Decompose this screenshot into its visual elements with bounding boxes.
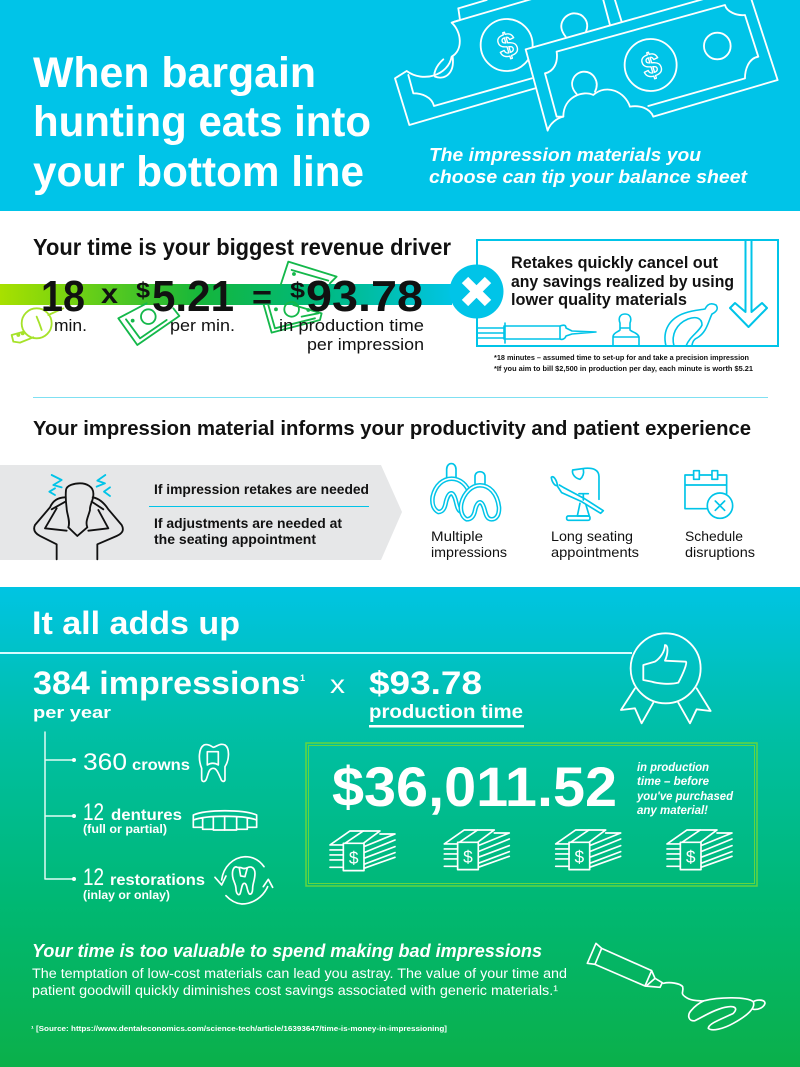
icon: x circle	[450, 264, 504, 318]
total note: time – before	[637, 776, 710, 788]
icon: dental chair	[551, 468, 603, 520]
item: restorations: 12	[83, 864, 104, 891]
icon: stressed person	[34, 475, 123, 559]
total amount: $36,011.52	[332, 755, 617, 818]
callout text	[511, 254, 734, 309]
icon: trays	[432, 464, 499, 519]
stat: production time: $93.78	[369, 665, 482, 701]
icon: syringe	[478, 323, 596, 343]
subtitle	[429, 144, 748, 187]
icon: bitten banknotes	[395, 0, 778, 131]
icon: thumbs up medal	[621, 633, 711, 723]
title: When bargain	[33, 49, 316, 97]
panel: header	[0, 0, 800, 211]
stat: impressions per year: per year	[33, 703, 111, 722]
item: restorations	[83, 864, 205, 902]
closing text: The temptation of low-cost materials can lead you astray. The value of your time and	[32, 966, 567, 981]
icon: cash stack 4	[667, 830, 732, 870]
retake conditions: the seating appointment	[154, 532, 317, 547]
icon: cash stack 1	[330, 831, 395, 871]
icon: impression tray	[665, 304, 717, 346]
total note: you've purchased	[636, 791, 734, 803]
icon: cash stack 2	[444, 830, 509, 870]
gradient bar	[0, 284, 452, 305]
title: your bottom line	[33, 148, 364, 196]
stat: production time	[369, 665, 524, 728]
equation numbers: 93.78	[306, 272, 423, 321]
item: dentures: 12	[83, 799, 104, 826]
item: crowns: 360	[83, 749, 127, 776]
total note: any material!	[637, 805, 708, 817]
closing text	[32, 966, 567, 998]
icon: dentures	[193, 811, 257, 830]
equation numbers: =	[252, 279, 272, 315]
heading: it all adds up: It all adds up	[32, 605, 240, 641]
label: schedule: Schedule	[685, 528, 743, 544]
stat: production time: production time	[369, 702, 523, 723]
retake conditions: If adjustments are needed at	[154, 516, 343, 531]
title	[33, 49, 371, 196]
footnotes	[494, 353, 753, 373]
retake conditions: If impression retakes are needed	[154, 482, 369, 497]
callout: total box	[306, 743, 757, 886]
icon: banknote small	[118, 303, 179, 345]
title: hunting eats into	[33, 98, 371, 146]
callout text: lower quality materials	[511, 291, 687, 309]
equation numbers: 5.21	[152, 272, 234, 321]
retake conditions	[149, 482, 369, 547]
label: schedule	[685, 528, 755, 560]
panel: productivity and patient experience	[0, 417, 755, 560]
icon: calendar with x	[685, 471, 733, 518]
callout text: any savings realized by using	[511, 273, 734, 291]
subtitle: The impression materials you	[429, 144, 701, 165]
equation numbers: 18	[41, 272, 85, 321]
heading: revenue driver: Your time is your biggest revenue driver	[33, 234, 451, 260]
equation numbers: $	[136, 278, 150, 303]
closing heading: Your time is too valuable to spend making bad impressions	[32, 940, 542, 961]
icon: crown tooth	[199, 744, 228, 782]
icon: bitten banknotes: $	[637, 46, 666, 87]
equation numbers: $	[290, 278, 305, 303]
icon: cash stack 1: $	[349, 848, 359, 868]
icon: down arrow	[730, 241, 767, 327]
item: crowns	[83, 749, 190, 776]
grey arrow panel	[0, 465, 402, 560]
equation labels: in production time	[279, 317, 424, 335]
closing text: patient goodwill quickly diminishes cost savings associated with generic materials.¹	[32, 983, 559, 998]
label: long seating: appointments	[551, 544, 639, 560]
total note	[636, 762, 734, 817]
item: crowns: crowns	[132, 757, 190, 774]
stat: impressions per year: 1	[300, 673, 305, 683]
icon: bottle	[613, 314, 639, 346]
subtitle: choose can tip your balance sheet	[429, 166, 748, 187]
equation numbers	[41, 272, 423, 321]
stat: impressions per year: 384 impressions	[33, 665, 300, 701]
equation labels	[54, 317, 424, 354]
item: restorations: (inlay or onlay)	[83, 890, 170, 902]
total note: in production	[637, 762, 709, 774]
icon: restoration cycle	[215, 857, 273, 904]
footnotes: *If you aim to bill $2,500 in production per day, each minute is worth $5.21	[494, 364, 753, 373]
icon: cash stack 3	[556, 830, 621, 870]
label: long seating	[551, 528, 639, 560]
tree diagram	[45, 732, 273, 904]
item: restorations: restorations	[110, 872, 205, 889]
heading: productivity: Your impression material informs your productivity and patient experience	[33, 417, 751, 440]
source footnote: ¹ [Source: https://www.dentaleconomics.com/science-tech/article/16393647/time-is-money-in-impressioning]	[31, 1026, 447, 1033]
panel: it all adds up	[0, 587, 800, 1067]
equation numbers: x	[101, 278, 118, 309]
stat: impressions per year: x	[330, 669, 345, 699]
item: long seating	[551, 468, 639, 560]
icon: cash stack 3: $	[575, 847, 585, 867]
icon: watch	[12, 305, 63, 343]
label: multiple impressions: impressions	[431, 544, 507, 560]
footnotes: *18 minutes – assumed time to set-up for and take a precision impression	[494, 353, 749, 362]
callout text: Retakes quickly cancel out	[511, 254, 718, 272]
label: multiple impressions	[431, 528, 507, 560]
stat: impressions per year	[33, 665, 345, 722]
equation labels: per min.	[170, 317, 235, 335]
icon: banknotes pair	[263, 262, 337, 333]
equation labels: per impression	[307, 336, 424, 354]
item: schedule	[685, 471, 755, 560]
label: multiple impressions: Multiple	[431, 528, 483, 544]
icon: cash stack 4: $	[686, 847, 696, 867]
label: schedule: disruptions	[685, 544, 755, 560]
icon: cash stack 2: $	[463, 847, 473, 867]
equation labels: min.	[54, 317, 87, 335]
item: multiple impressions	[431, 464, 507, 560]
item: dentures: dentures	[111, 807, 182, 824]
label: long seating: Long seating	[551, 528, 633, 544]
panel: revenue driver	[0, 234, 778, 373]
callout: retakes box	[477, 240, 778, 346]
icon: impression material tube and tray	[587, 943, 765, 1030]
item: dentures: (full or partial)	[83, 824, 167, 836]
icon: bitten banknotes: $	[493, 26, 522, 67]
item: dentures	[83, 799, 182, 836]
